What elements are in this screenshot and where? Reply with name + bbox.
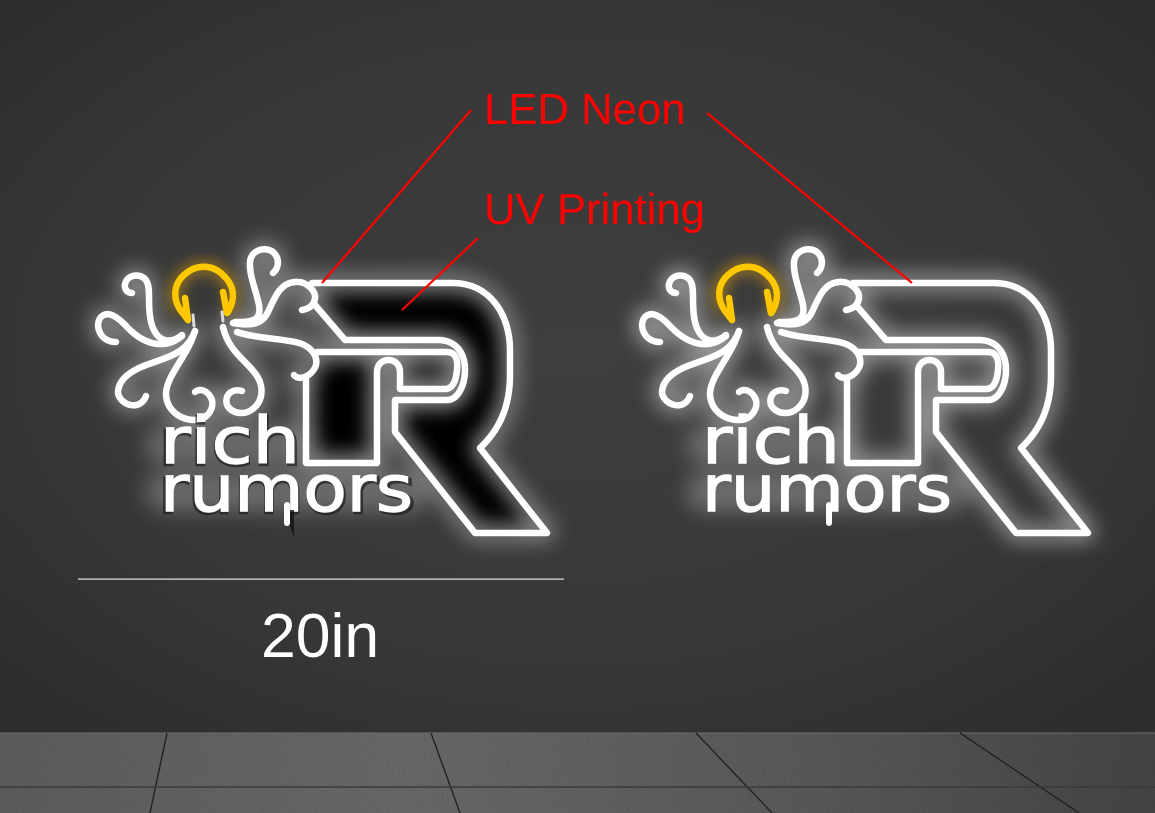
left sign glow [98,249,547,533]
R outline [847,283,1088,533]
leader line: UV Printing to left sign [402,238,478,310]
octopus tentacles [642,249,860,420]
dimension line [78,578,564,580]
UV printed black R fill [313,291,532,526]
leader line: LED Neon to right sign [707,113,912,283]
m tail [284,505,290,523]
headphones [719,267,777,320]
word: rich (shadow): rich [158,407,302,481]
label: LED Neon: LED Neon [484,85,686,134]
headphones glow [719,267,777,312]
leader line: LED Neon to left sign [322,110,471,283]
headphones [175,267,233,320]
dimension label: 20in: 20in [261,601,379,671]
octopus tentacles [98,249,316,420]
word: rumors: rumors [702,453,952,527]
R outline [306,283,547,533]
m tail [826,505,832,523]
word: rumors: rumors [160,453,413,527]
left neon sign: with UV printing [98,249,547,537]
label: UV Printing: UV Printing [484,185,705,234]
word: rich: rich [160,405,300,479]
floor [0,733,1155,813]
headphones glow [175,267,233,312]
word: rumors (shadow): rumors [158,455,416,529]
right sign glow [642,249,1088,533]
m tail shadow [284,510,294,537]
word: rich: rich [702,405,840,479]
right neon sign: lit, no print [642,249,1088,533]
printed highlights under headphones [193,312,223,326]
